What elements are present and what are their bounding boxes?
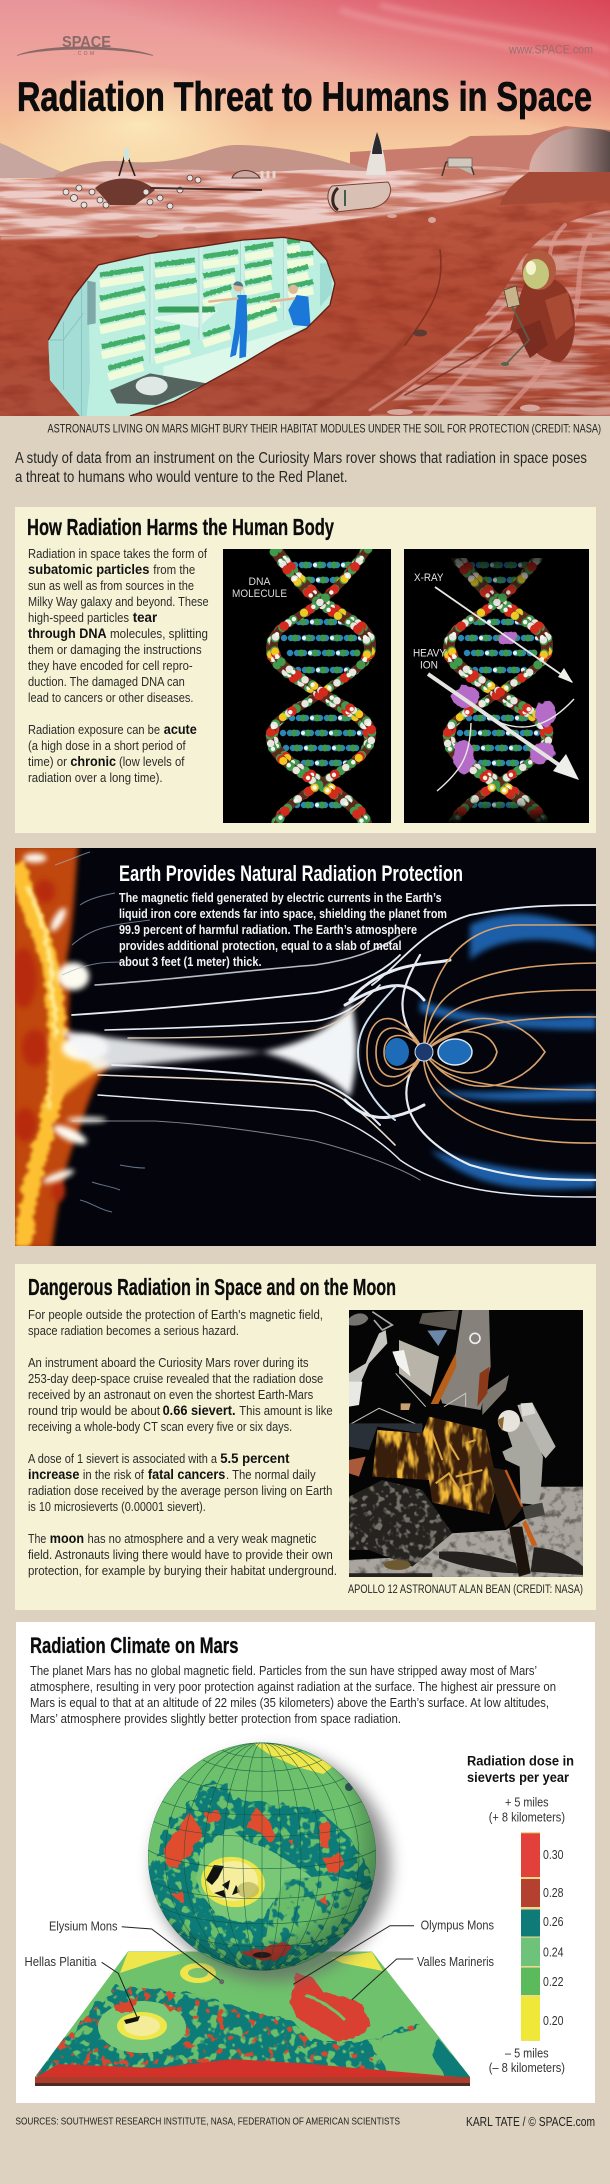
teal radiation band xyxy=(145,1782,378,1975)
yellow polar zone xyxy=(253,1743,335,1774)
body text: An instrument aboard the Curiosity Mars rover during its xyxy=(28,1355,309,1370)
surface streams xyxy=(300,225,590,416)
scale values: 0.30 xyxy=(543,1848,564,1862)
x-ray arrow xyxy=(435,587,573,683)
hero illustration: Mars colony xyxy=(0,0,610,420)
x-ray and heavy ion labels xyxy=(413,572,447,672)
top altitude label xyxy=(489,1796,565,1824)
body text: The magnetic field generated by electric currents in the Earth’s xyxy=(119,890,442,905)
side bulkhead xyxy=(48,263,332,417)
rocket xyxy=(366,132,386,175)
south polar red xyxy=(240,1942,292,1960)
x-ray and heavy ion labels: HEAVY xyxy=(413,648,447,660)
heavy ion arrow xyxy=(428,674,579,780)
light green interior xyxy=(197,1828,320,1922)
red highlands xyxy=(113,1997,177,2012)
panel: earth natural protection xyxy=(10,845,596,1249)
cutaway rim xyxy=(48,237,335,416)
martian ground xyxy=(0,160,610,416)
panel: radiation climate on mars xyxy=(16,1622,595,2103)
sources footer: SOURCES: SOUTHWEST RESEARCH INSTITUTE, NASA, FEDERATION OF AMERICAN SCIENTISTS xyxy=(16,2116,400,2128)
body text: moon xyxy=(50,1530,84,1546)
body text: through DNA xyxy=(28,625,107,641)
body text: 99.9 percent of harmful radiation. The Earth’s atmosphere xyxy=(119,922,417,937)
leader: olympus mons xyxy=(293,1926,414,1984)
body text: Milky Way galaxy and beyond. These xyxy=(28,594,209,609)
body text xyxy=(28,1307,337,1578)
sky xyxy=(0,0,610,185)
body text: The planet Mars has no global magnetic field. Particles from the sun have stripped away most of Mars’ xyxy=(30,1663,537,1678)
body text: Mars’ atmosphere provides slightly better protection from space radiation. xyxy=(30,1711,401,1726)
scale values: 0.26 xyxy=(543,1915,564,1929)
heading: Dangerous Radiation in Space and on the Moon xyxy=(28,1274,396,1300)
body text: A dose of 1 sievert is associated with a xyxy=(28,1451,218,1466)
mars globe xyxy=(140,1742,380,1980)
map labels: Hellas Planitia xyxy=(24,1955,97,1969)
blue magnetosphere glow xyxy=(420,914,596,1189)
body text: protection, for example by burying their habitat underground. xyxy=(28,1563,337,1578)
sun xyxy=(10,845,110,1249)
legend title xyxy=(467,1754,574,1785)
underground habitat cutaway xyxy=(43,233,343,420)
crew member kneeling xyxy=(270,285,311,327)
scale values: 0.20 xyxy=(543,2014,564,2028)
dna molecule image xyxy=(223,549,391,826)
body text: round trip would be about xyxy=(28,1403,160,1418)
red highlands on globe xyxy=(163,1808,345,1905)
body text: them or damaging the instructions xyxy=(28,642,202,657)
damaged dna image xyxy=(404,549,589,826)
earth xyxy=(385,1038,472,1066)
shelf posts xyxy=(152,237,285,363)
intro paragraph: a threat to humans who would venture to the Red Planet. xyxy=(15,469,348,486)
body text: about 3 feet (1 meter) thick. xyxy=(119,954,262,969)
body text: space radiation becomes a serious hazard. xyxy=(28,1323,239,1338)
body text: time) or xyxy=(28,754,68,769)
body text: fatal cancers xyxy=(148,1466,225,1482)
faint solar wind lines xyxy=(55,852,150,1212)
astronaut xyxy=(501,250,575,366)
space.com logo: .COM xyxy=(74,51,94,57)
machinery xyxy=(110,373,207,405)
floor xyxy=(163,326,306,388)
crew member standing xyxy=(208,281,247,358)
lander upper structure xyxy=(349,1310,509,1450)
foot pad and left steps xyxy=(349,1457,411,1570)
map labels: Olympus Mons xyxy=(421,1918,494,1932)
colour scale xyxy=(521,1832,540,2041)
map mottling xyxy=(30,1985,475,2085)
shelf lighting xyxy=(100,249,313,377)
dna label: DNA xyxy=(248,576,271,588)
body text: molecules, splitting xyxy=(110,626,208,641)
bottom altitude label: (– 8 kilometers) xyxy=(489,2061,565,2075)
body text: is 10 microsieverts (0.00001 sievert). xyxy=(28,1499,206,1514)
top altitude label: + 5 miles xyxy=(505,1796,549,1810)
intro paragraph xyxy=(15,450,587,486)
body text: lead to cancers or other diseases. xyxy=(28,690,193,705)
globe shadow xyxy=(154,1751,390,1981)
body text: (a high dose in a short period of xyxy=(28,738,186,753)
body text: field. Astronauts living there would have to provide their own xyxy=(28,1547,333,1562)
map yellow zones xyxy=(120,1952,383,1983)
hellas basin xyxy=(98,2001,186,2053)
leader: elysium mons xyxy=(122,1927,224,1984)
body text: . The normal daily xyxy=(226,1467,316,1482)
body text: liquid iron core extends far into space, shielding the planet from xyxy=(119,906,447,921)
body text: has no atmosphere and a very weak magnetic xyxy=(88,1531,317,1546)
legend xyxy=(467,1754,574,2075)
body text: Radiation in space takes the form of xyxy=(28,546,207,561)
body text: in the risk of xyxy=(83,1467,144,1482)
orange magnetic field lines xyxy=(367,925,596,1143)
lunar rock xyxy=(349,1477,456,1570)
rover lander xyxy=(442,158,474,176)
heading: How Radiation Harms the Human Body xyxy=(27,514,334,540)
scale values xyxy=(543,1848,564,2028)
pale domes field xyxy=(63,175,201,209)
northeast speckled green xyxy=(262,1870,377,1950)
scale values: 0.24 xyxy=(543,1946,564,1960)
white field lines xyxy=(72,905,596,1197)
legend title: sieverts per year xyxy=(467,1770,570,1785)
bottom altitude label xyxy=(489,2046,565,2075)
ground shadows xyxy=(349,1547,583,1577)
body text: atmosphere, resulting in very poor protection against radiation at the surface. The highest air pressure on xyxy=(30,1679,556,1694)
ionized fragments xyxy=(452,628,558,774)
heading: Radiation Climate on Mars xyxy=(30,1633,238,1658)
map labels: Valles Marineris xyxy=(417,1955,494,1969)
space.com logo: SPACE xyxy=(62,34,111,51)
body text: radiation over a long time). xyxy=(28,770,163,785)
dna label xyxy=(232,576,287,600)
apollo 12 photograph xyxy=(349,1310,583,1577)
body text: (low levels of xyxy=(119,754,185,769)
body text: sun as well as from sources in the xyxy=(28,578,194,593)
body text: acute xyxy=(164,721,197,737)
map labels xyxy=(24,1918,494,1969)
legend title: Radiation dose in xyxy=(467,1754,574,1768)
body text: tear xyxy=(133,609,158,625)
scale values: 0.28 xyxy=(543,1886,564,1900)
bottom altitude label: – 5 miles xyxy=(505,2046,549,2060)
body text: high-speed particles xyxy=(28,610,129,625)
tharsis red region xyxy=(290,1973,370,2042)
body text: For people outside the protection of Earth's magnetic field, xyxy=(28,1307,323,1322)
body text: 0.66 sievert. xyxy=(163,1402,236,1418)
scale values: 0.22 xyxy=(543,1975,564,1989)
body text: from the xyxy=(153,562,195,577)
graticule xyxy=(148,1742,376,1971)
top altitude label: (+ 8 kilometers) xyxy=(489,1810,565,1824)
pipeline and small habitat xyxy=(150,170,274,190)
southern red strip xyxy=(35,2059,470,2078)
body text: subatomic particles xyxy=(28,561,150,577)
body text xyxy=(119,890,447,969)
x-ray and heavy ion labels: X-RAY xyxy=(414,572,444,584)
body text: provides additional protection, equal to a slab of metal xyxy=(119,938,402,953)
body text: duction. The damaged DNA can xyxy=(28,674,185,689)
astronaut alan bean xyxy=(497,1403,556,1519)
leader: valles marineris xyxy=(352,1959,413,2000)
body text: chronic xyxy=(70,753,116,769)
map labels: Elysium Mons xyxy=(49,1920,118,1934)
dna label: MOLECULE xyxy=(232,588,287,600)
body text: The xyxy=(28,1531,46,1546)
plants xyxy=(100,240,313,368)
rocks xyxy=(138,214,540,415)
lunar ground xyxy=(349,1483,583,1577)
body text: increase xyxy=(28,1466,80,1482)
solar wind stream xyxy=(60,1003,356,1097)
body text: This amount is like xyxy=(239,1403,333,1418)
leader: hellas planitia xyxy=(102,1962,138,2020)
body text: Radiation exposure can be xyxy=(28,722,160,737)
body text: radiation dose received by the average person living on Earth xyxy=(28,1483,332,1498)
body text: received by an astronaut on even the shortest Earth-Mars xyxy=(28,1387,313,1402)
x-ray and heavy ion labels: ION xyxy=(420,660,438,672)
flat topographic map xyxy=(20,1950,485,2086)
panel: dangerous radiation in space and on the moon xyxy=(15,1264,596,1610)
website credit: www.SPACE.com xyxy=(508,42,593,56)
body text: Mars is equal to that at an altitude of 22 miles (35 kilometers) above the Earth’s surface. At low altitudes, xyxy=(30,1695,549,1710)
body text: 253-day deep-space cruise revealed that the radiation dose xyxy=(28,1371,323,1386)
body text xyxy=(30,1663,556,1726)
tower xyxy=(95,148,155,205)
distant hills xyxy=(0,126,610,180)
teal band mottling xyxy=(140,1780,380,1980)
body text: they have encoded for cell repro- xyxy=(28,658,193,673)
body text xyxy=(28,546,209,785)
scattered particle arrows xyxy=(437,699,574,791)
body text: receiving a whole-body CT scan every five or six days. xyxy=(28,1419,292,1434)
panel: how radiation harms the body xyxy=(15,507,596,833)
hellas basin on globe xyxy=(198,1853,268,1911)
heading: Earth Provides Natural Radiation Protection xyxy=(119,861,463,886)
body text: 5.5 percent xyxy=(220,1450,290,1466)
tray xyxy=(155,310,218,327)
gold foil descent stage xyxy=(369,1413,502,1517)
half-buried cylinder xyxy=(328,182,391,212)
space.com logo xyxy=(17,34,153,57)
ladder and leg xyxy=(487,1467,537,1577)
map teal band xyxy=(20,1985,485,2085)
large dome xyxy=(500,128,610,205)
